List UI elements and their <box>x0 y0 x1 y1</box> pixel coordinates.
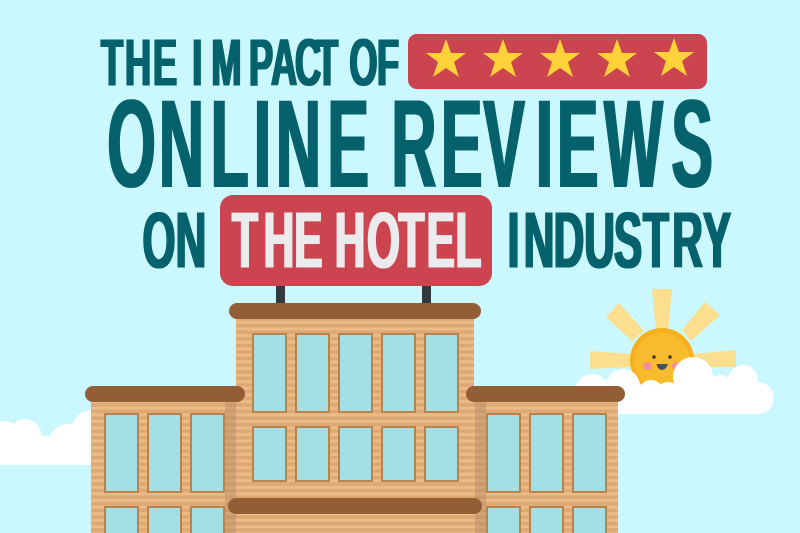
sign: The Hotel: THE HOTEL <box>232 195 481 285</box>
icon: star 5 <box>654 38 694 76</box>
title line: The Impact Of: THE IMPACT OF <box>101 26 399 100</box>
left wing roof <box>85 386 245 402</box>
right wing roof <box>466 386 625 402</box>
sun face <box>643 355 681 370</box>
tower upper windows <box>253 334 458 412</box>
center tower <box>226 303 485 533</box>
cloud: right <box>575 357 774 414</box>
left wing roof overlap <box>226 386 245 402</box>
sun <box>590 289 736 392</box>
icon: star 4 <box>597 39 637 77</box>
sun disc <box>630 328 694 392</box>
title word: Industry: INDUSTRY <box>508 195 731 285</box>
right wing roof overlap <box>466 386 485 402</box>
cloud: left <box>0 410 113 465</box>
title line: Online Reviews: ONLINE REVIEWS <box>107 74 713 214</box>
star rating badge <box>408 34 707 89</box>
right wing <box>466 386 625 533</box>
tower band <box>228 498 482 514</box>
icon: star 3 <box>540 39 580 77</box>
tower roof <box>229 303 481 319</box>
left wing windows <box>105 414 224 533</box>
right wing windows <box>487 414 606 533</box>
icon: star 2 <box>483 39 523 77</box>
icon: star 1 <box>426 39 466 77</box>
left wing <box>85 386 245 533</box>
building <box>85 286 625 533</box>
sign poles <box>276 286 431 303</box>
sun rays <box>590 289 736 369</box>
title word: On: ON <box>143 195 206 285</box>
tower lower windows <box>253 427 458 481</box>
